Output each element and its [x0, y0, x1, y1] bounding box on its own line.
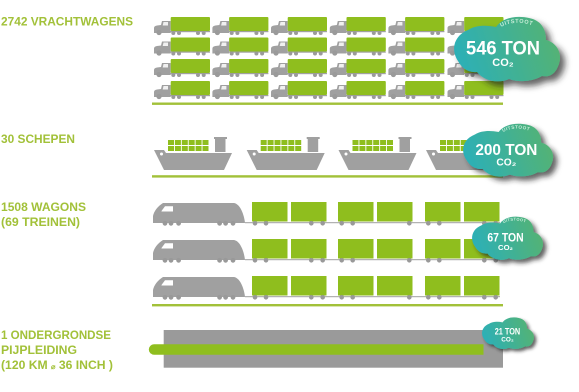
cloud: 21 ton: CO₂	[501, 336, 514, 344]
label: wagons: 1508 WAGONS	[1, 202, 86, 214]
trains	[152, 202, 503, 306]
cloud: 67 ton: 67 TON	[487, 230, 524, 244]
cloud: 67 ton	[472, 216, 550, 266]
label: pipeline: 1 ONDERGRONDSE	[1, 330, 111, 342]
label: pipeline	[1, 330, 113, 372]
label: wagons: (69 TREINEN)	[1, 217, 80, 229]
cloud: 21 ton: 21 TON	[495, 327, 520, 337]
cloud: 67 ton: CO₂	[498, 243, 514, 252]
cloud: 546 ton: UITSTOOT	[500, 18, 533, 26]
cloud: 200 ton: UITSTOOT	[502, 125, 530, 132]
cloud: 21 ton	[482, 317, 534, 349]
cloud: 200 ton: 200 TON	[475, 142, 537, 159]
label: ships: 30 SCHEPEN	[1, 134, 75, 146]
label: pipeline: (120 KM ⌀ 36 INCH )	[1, 360, 113, 372]
label: trucks: 2742 VRACHTWAGENS	[1, 16, 133, 28]
label: wagons	[1, 202, 86, 229]
label: pipeline: PIJPLEIDING	[1, 345, 77, 357]
pipeline	[149, 330, 503, 368]
cloud: 200 ton: CO₂	[496, 158, 516, 169]
ship row	[152, 137, 504, 178]
cloud: 546 ton: 546 TON	[466, 38, 540, 60]
cloud: 200 ton	[463, 124, 562, 185]
truck grid	[152, 17, 504, 105]
cloud: 67 ton: UITSTOOT	[502, 218, 526, 223]
cloud: 546 ton	[454, 16, 570, 92]
cloud: 546 ton: CO₂	[492, 57, 514, 69]
